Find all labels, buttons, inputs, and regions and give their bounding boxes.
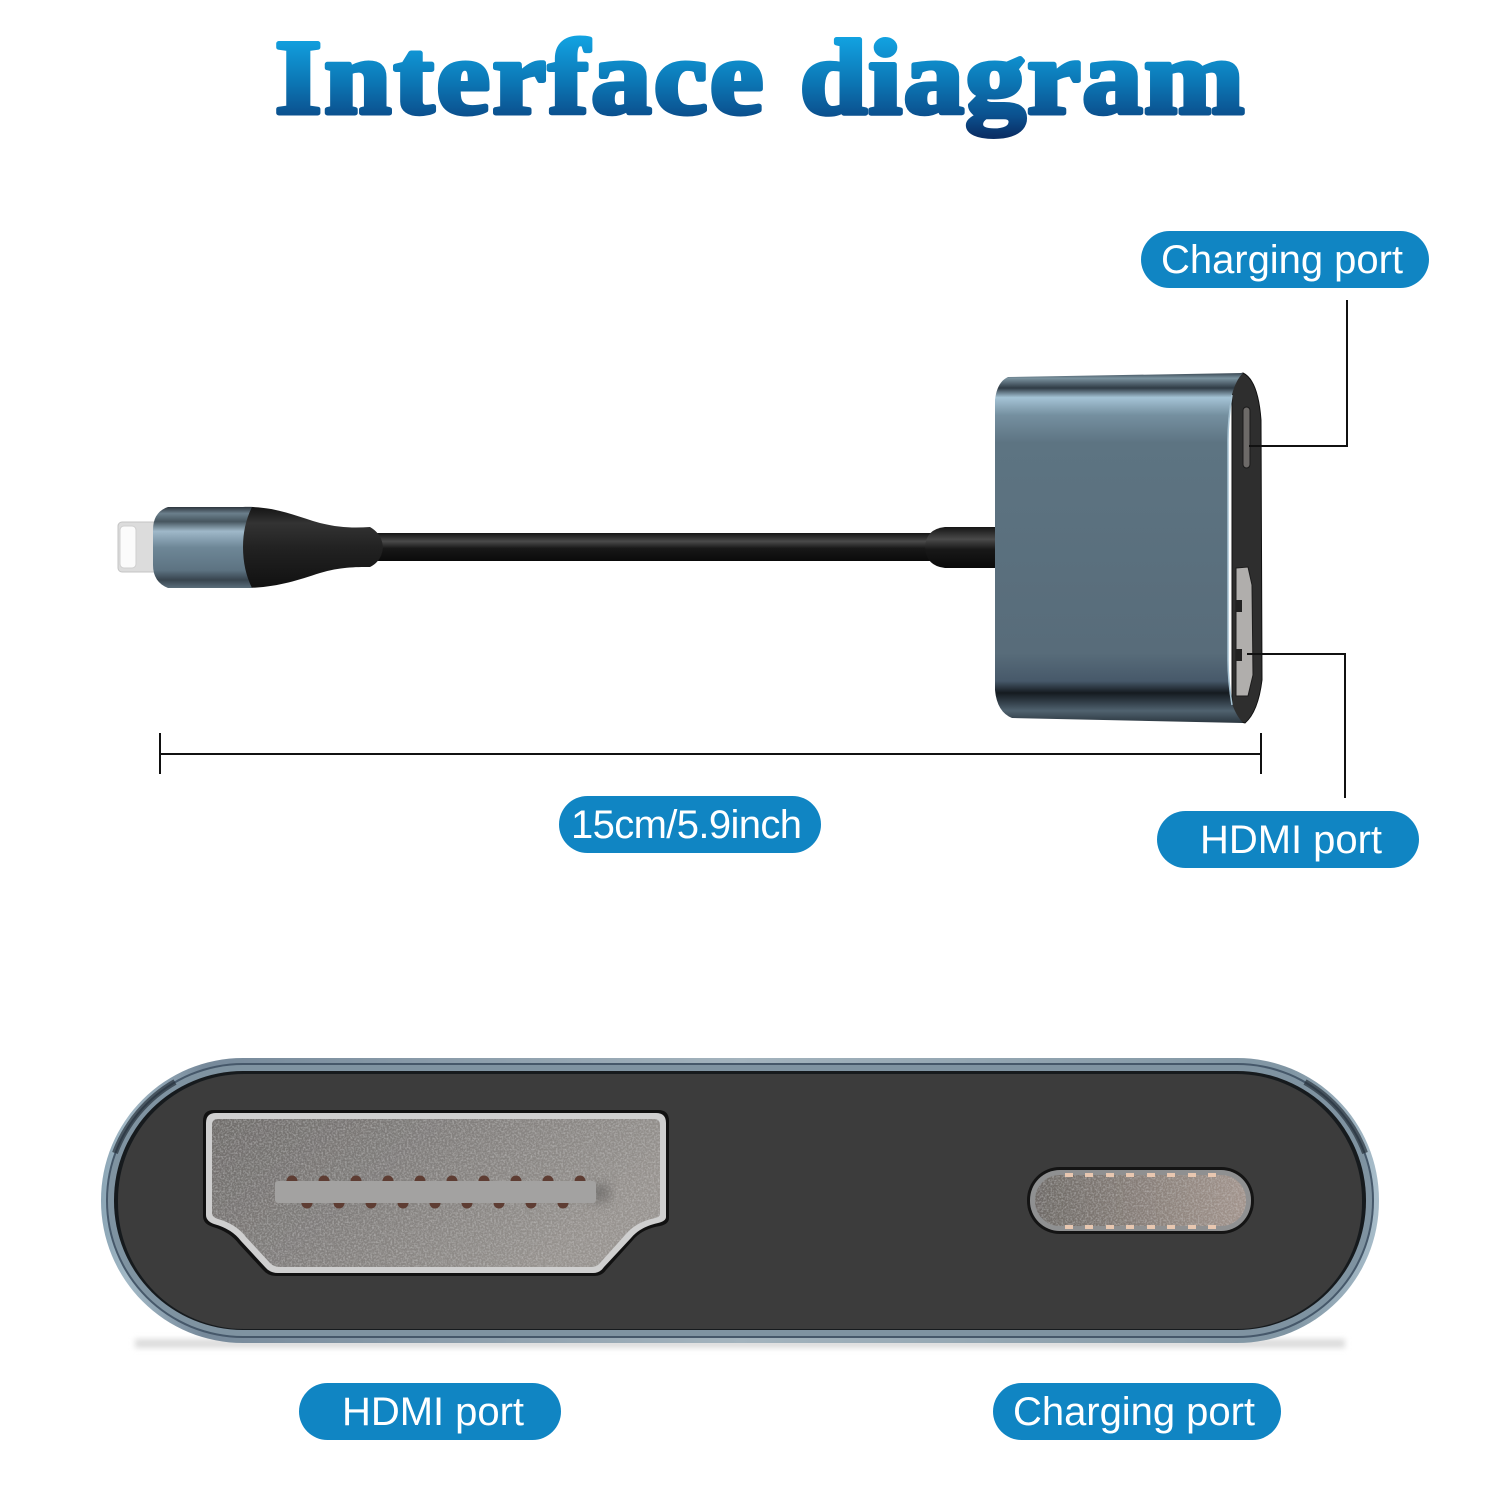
label: HDMI port (bottom): [299, 1383, 561, 1440]
charging pins: [1065, 1173, 1216, 1229]
side HDMI port: [1236, 567, 1253, 696]
cable strain relief: [925, 527, 996, 568]
HDMI tongue shadow: [588, 1184, 610, 1202]
cable: [370, 533, 935, 561]
HDMI top pins: [286, 1176, 586, 1186]
label: charging port (top): [1141, 231, 1429, 288]
label: charging port (bottom): [993, 1383, 1281, 1440]
HDMI tongue: [275, 1181, 596, 1203]
side charging slot: [1243, 407, 1250, 468]
rim corner shading: [115, 1082, 1365, 1153]
title: Interface: [275, 19, 766, 136]
dimension line: [160, 733, 1261, 774]
label: length: [559, 796, 821, 853]
label: HDMI port (top): [1157, 811, 1419, 868]
connector metal housing: [153, 507, 252, 588]
body edge highlight: [1228, 395, 1232, 705]
label: length: 15cm/5.9inch: [571, 803, 802, 847]
lightning tip: [118, 522, 158, 572]
adapter end face: [1232, 373, 1262, 723]
ground shadow: [135, 1339, 1345, 1348]
adapter body: [995, 373, 1243, 723]
connector boot: [243, 507, 383, 588]
HDMI port: [203, 1110, 669, 1276]
label: HDMI port (bottom): HDMI port: [342, 1390, 524, 1434]
leader line: charging port: [1249, 300, 1347, 446]
title: [275, 19, 1246, 136]
metal rim: [101, 1058, 1379, 1343]
HDMI bottom pins: [302, 1198, 568, 1208]
charging port: [1027, 1167, 1254, 1234]
label: charging port (bottom): Charging port: [1013, 1390, 1255, 1434]
product: port close-up: [101, 1058, 1379, 1348]
product: adapter side view: [118, 373, 1262, 723]
leader line: HDMI port: [1247, 654, 1345, 798]
black end face: [118, 1074, 1362, 1329]
label: HDMI port (top): HDMI port: [1200, 818, 1382, 862]
label: charging port (top): Charging port: [1161, 238, 1403, 282]
title: diagram: [800, 19, 1246, 136]
